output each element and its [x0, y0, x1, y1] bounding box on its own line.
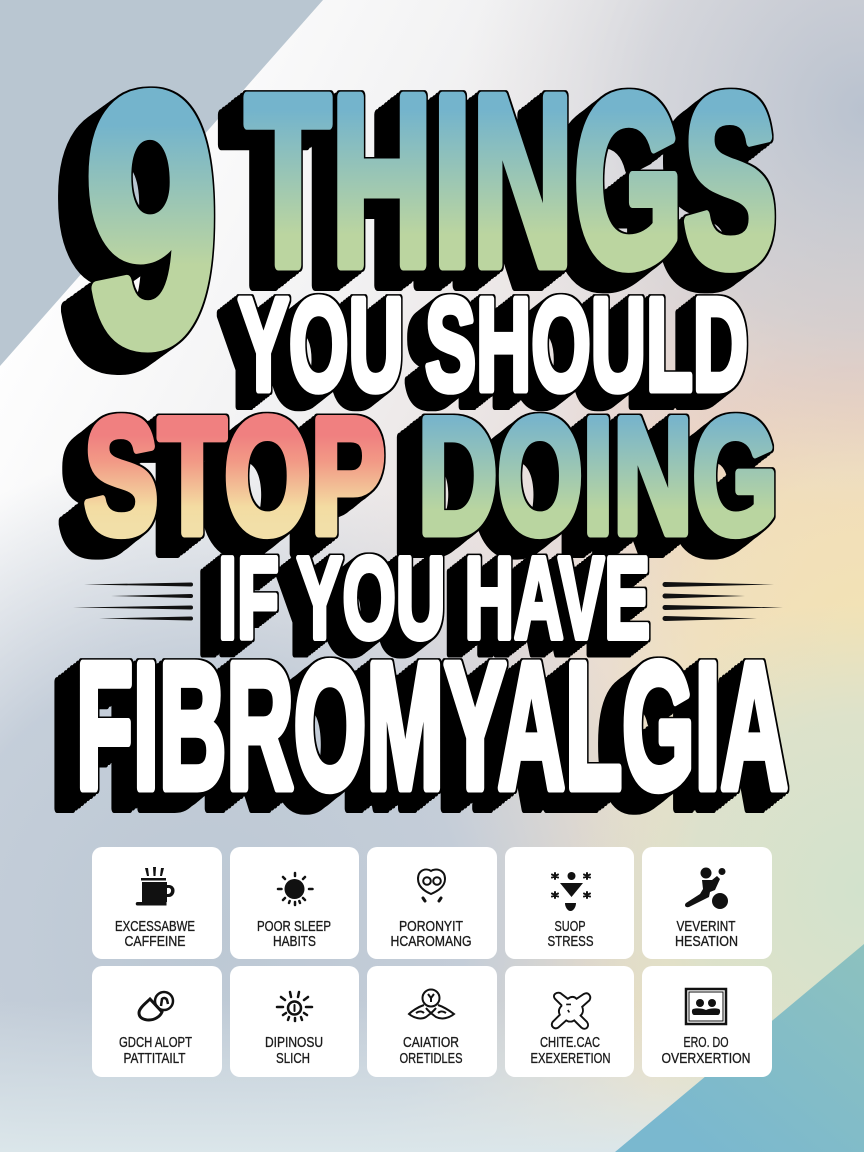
icon: stress shapes: [552, 872, 590, 911]
card text: PORONYIT: [399, 918, 463, 935]
card text: [257, 918, 331, 950]
card: dipinosu sleh: [230, 966, 359, 1077]
icon: outlined sun: [277, 992, 312, 1021]
card: movement: [642, 847, 772, 959]
card: overexertion: [642, 966, 772, 1077]
icon: heart with eyes: [418, 870, 445, 901]
icon: coffee cup: [136, 867, 175, 906]
card: poor sleep habits: [230, 847, 359, 959]
panel: icon card grid: [92, 847, 772, 1077]
card text: ORETIDLES: [400, 1050, 462, 1067]
card text: [265, 1034, 323, 1067]
card text: POOR SLEEP: [257, 918, 331, 935]
card text: PATTITAILT: [124, 1050, 186, 1067]
card text: SLICH: [276, 1050, 310, 1067]
card text: EXEXERETION: [530, 1050, 610, 1067]
card text: [530, 1034, 610, 1067]
card text: EXCESSABWE: [115, 918, 195, 935]
decorative corner: bottom right: [615, 944, 864, 1152]
card text: [115, 918, 195, 950]
speed lines left: [73, 582, 193, 620]
icon: drop and coin: [139, 992, 173, 1020]
card text: HABITS: [273, 933, 316, 950]
card: stop stress: [505, 847, 634, 959]
decorative corner: top left: [0, 0, 323, 366]
card text: HESATION: [675, 933, 738, 950]
card text: [548, 918, 594, 950]
card text: DIPINOSU: [265, 1034, 323, 1051]
card text: SUOP: [554, 918, 586, 935]
title numeral 9: 9: [85, 23, 218, 418]
card text: CAIATIOR: [403, 1034, 459, 1051]
card text: [675, 918, 738, 950]
card: goch alopt: [92, 966, 222, 1077]
icon: knot: [409, 990, 454, 1018]
title: [76, 23, 788, 827]
card text: [119, 1034, 192, 1067]
icon: crossed bandage figure: [552, 993, 590, 1029]
card: caniator: [367, 966, 497, 1077]
card text: HCAROMANG: [390, 933, 472, 950]
card text: [662, 1034, 750, 1067]
title word STOP: STOP: [84, 384, 385, 568]
card text: [390, 918, 472, 950]
speed lines right: [662, 582, 783, 621]
card text: ERO. DO: [684, 1034, 728, 1051]
card: chitecac exexeretion: [505, 966, 634, 1077]
card text: GDCH ALOPT: [119, 1034, 192, 1051]
card text: STRESS: [548, 933, 594, 950]
card: poor hormone: [367, 847, 497, 959]
icon: sun: [278, 873, 312, 905]
card text: OVERXERTION: [662, 1050, 750, 1067]
card text: CAFFEINE: [124, 933, 186, 950]
card text: [400, 1034, 462, 1067]
card text: CHITE.CAC: [540, 1034, 600, 1051]
icon: person with ball: [685, 868, 728, 909]
card: excessive caffeine: [92, 847, 222, 959]
card text: VEVERINT: [676, 918, 736, 935]
icon: framed people: [686, 989, 726, 1024]
